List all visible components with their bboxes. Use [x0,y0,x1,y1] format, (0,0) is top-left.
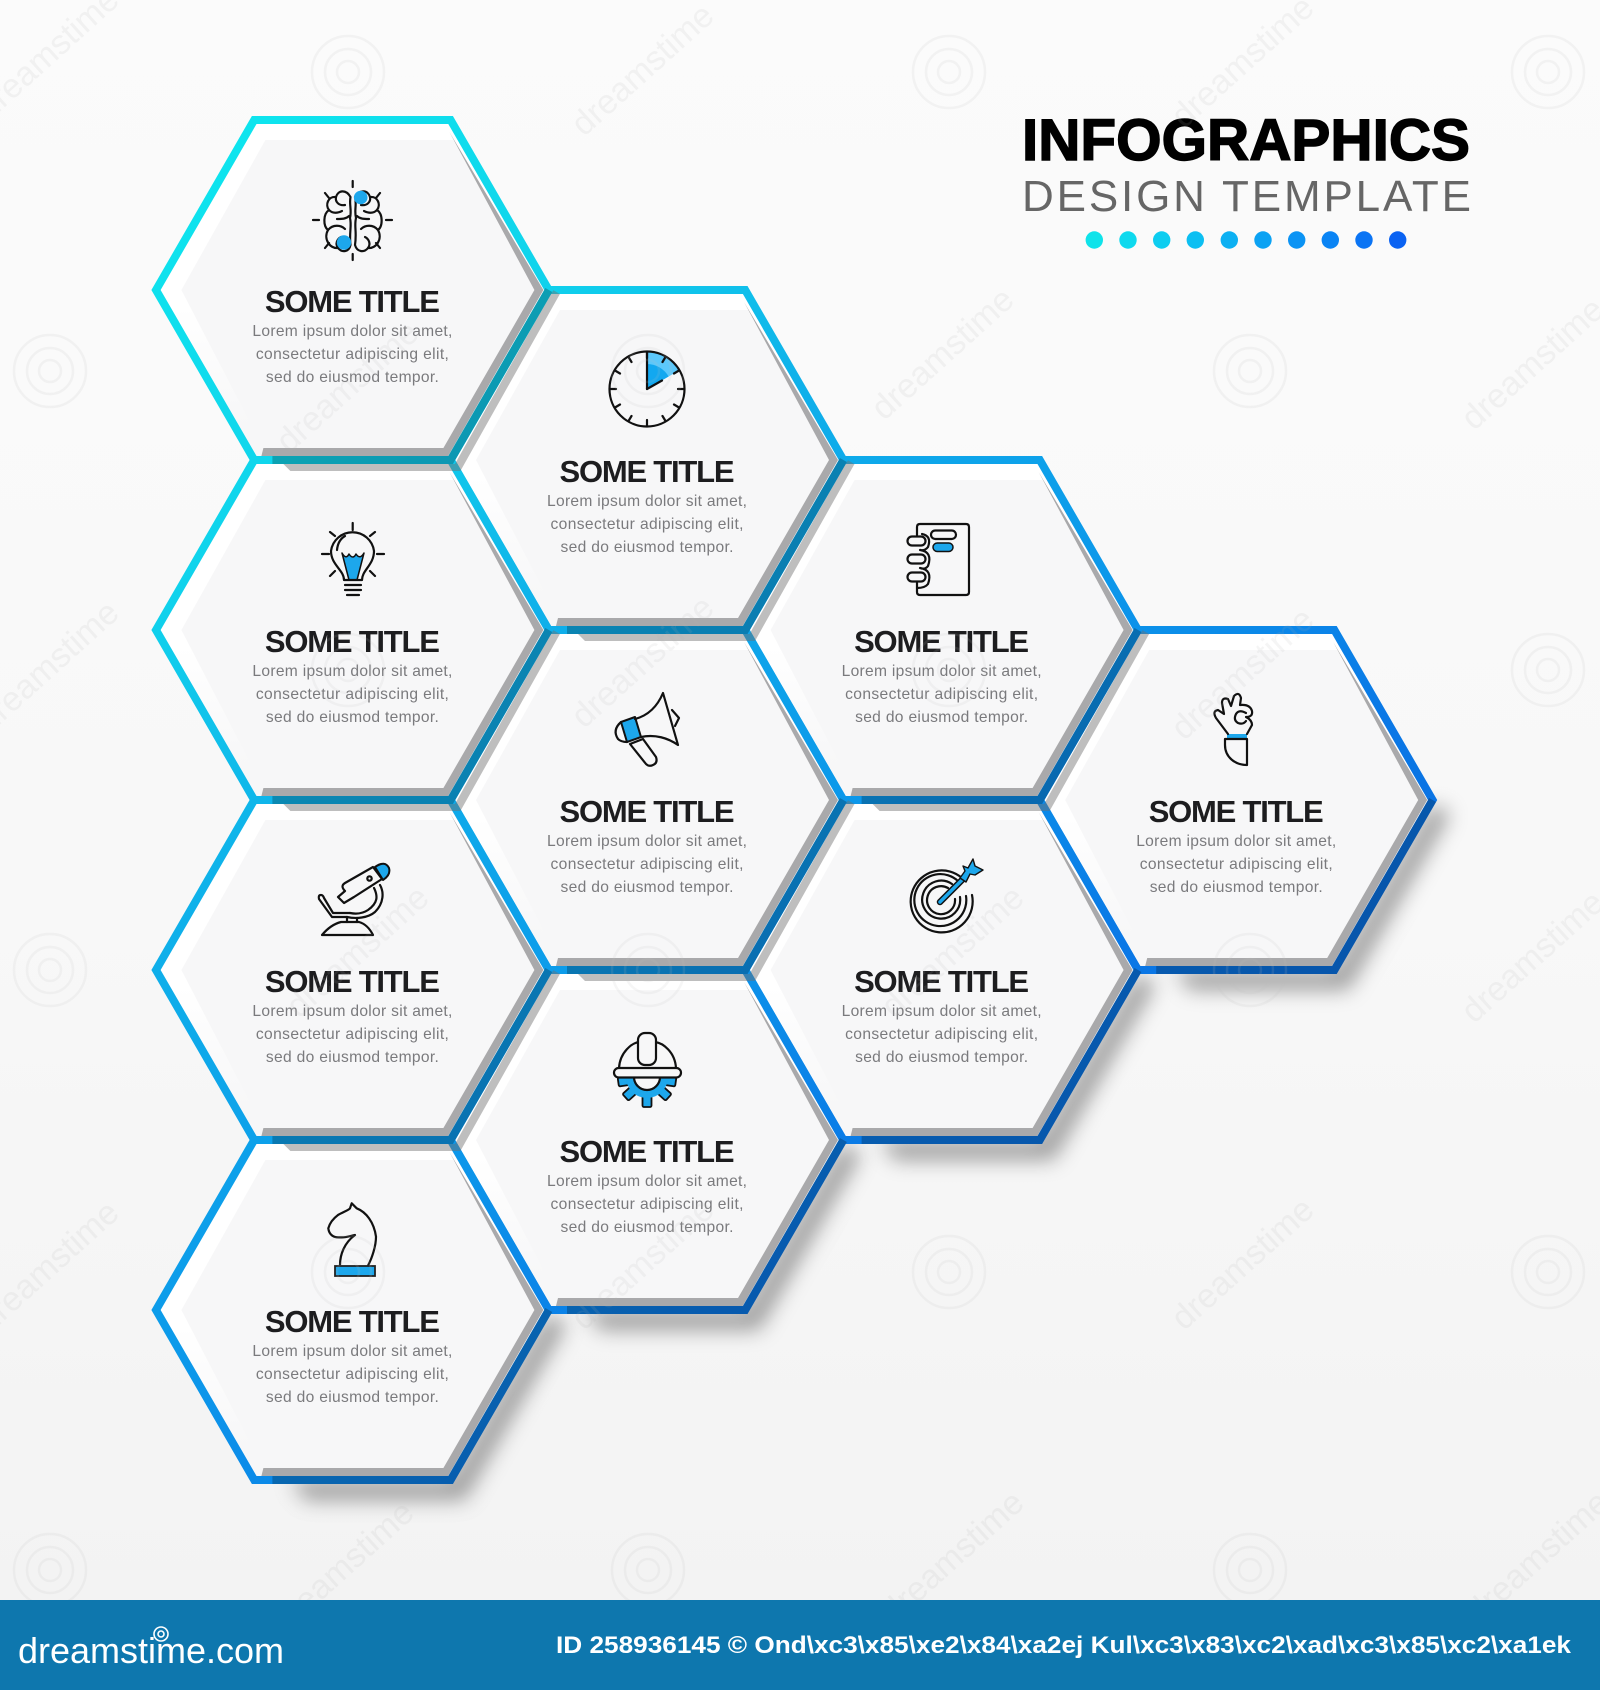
text block: consectetur adipiscing elit, [550,856,744,873]
watermark overlay: dreamstime [564,1190,721,1337]
panel: hexagon column 1, item 1 [156,120,560,471]
text block: consectetur adipiscing elit, [550,1196,744,1213]
watermark overlay: dreamstime [874,1483,1031,1630]
text block: Lorem ipsum dolor sit amet, [252,1343,452,1360]
title: SOME TITLE [265,624,440,659]
icon: brain [313,181,392,260]
footer credit: ID 258936145 © Ond\xc3\x85\xe2\x84\xa2ej Kul\xc3\x83\xc2\xad\xc3\x85\xc2\xa1ek [556,1632,1572,1659]
icon: hard hat with gear [614,1033,681,1107]
watermark overlay: dreamstime [264,1493,421,1640]
text block: sed do eiusmod tempor. [266,1049,439,1066]
panel: hexagon column 3, item 2 [745,800,1138,1140]
footer logo: dreamstime.com [18,1630,284,1671]
text block: sed do eiusmod tempor. [560,1219,734,1236]
title: SOME TITLE [560,794,734,829]
subheading: design template: DESIGN TEMPLATE [1022,172,1471,221]
text block: consectetur adipiscing elit, [550,516,744,533]
soft drop shadow of hexagon cluster [290,804,1450,1500]
text block: sed do eiusmod tempor. [266,369,439,386]
text block [547,833,747,896]
text block [252,323,452,386]
text block: consectetur adipiscing elit, [256,346,449,363]
title: SOME TITLE [854,624,1029,659]
panel: hexagon column 1, item 2 [156,460,560,811]
text block [252,1003,452,1066]
text block: consectetur adipiscing elit, [256,686,449,703]
text block [547,493,747,556]
title: SOME TITLE [560,1134,734,1169]
watermark overlay: dreamstime [874,878,1031,1025]
watermark overlay: dreamstime [279,878,436,1025]
text block: sed do eiusmod tempor. [266,1389,439,1406]
panel: hexagon column 4, item 1 [1040,630,1433,970]
watermark overlay: dreamstime [564,0,721,143]
text block: sed do eiusmod tempor. [560,539,734,556]
text block: Lorem ipsum dolor sit amet, [252,1003,452,1020]
text block: consectetur adipiscing elit, [256,1026,449,1043]
text block: consectetur adipiscing elit, [845,686,1038,703]
text block [842,1003,1042,1066]
text block: Lorem ipsum dolor sit amet, [547,833,747,850]
icon: target with arrow [911,859,983,932]
text block: consectetur adipiscing elit, [1140,856,1333,873]
text block [252,1343,452,1406]
title: SOME TITLE [265,1304,440,1339]
text block [842,663,1042,726]
icon: microscope [319,864,389,935]
icon: OK hand [1214,694,1252,765]
heading: infographics: INFOGRAPHICS [1022,108,1470,173]
text block: sed do eiusmod tempor. [266,709,439,726]
text block: consectetur adipiscing elit, [256,1366,449,1383]
panel: hexagon column 1, item 3 [156,800,560,1151]
text block: Lorem ipsum dolor sit amet, [1136,833,1336,850]
watermark overlay: dreamstime [269,313,426,460]
text block: Lorem ipsum dolor sit amet, [547,1173,747,1190]
title: SOME TITLE [265,964,440,999]
text block: Lorem ipsum dolor sit amet, [252,663,452,680]
text block: sed do eiusmod tempor. [855,709,1028,726]
icon: chess knight [328,1203,376,1276]
panel: hexagon column 2, item 3 [451,970,843,1310]
text block [1136,833,1336,896]
icon: notebook [908,524,969,595]
text block: consectetur adipiscing elit, [845,1026,1038,1043]
text block [252,663,452,726]
text block: sed do eiusmod tempor. [560,879,734,896]
panel: hexagon column 3, item 1 [745,460,1149,811]
footer bar [0,1600,1600,1690]
icon: light bulb [322,523,384,595]
title: SOME TITLE [560,454,734,489]
panel: hexagon column 1, item 4 [156,1140,549,1480]
text block: sed do eiusmod tempor. [1150,879,1323,896]
text block: Lorem ipsum dolor sit amet, [547,493,747,510]
text block: Lorem ipsum dolor sit amet, [842,1003,1042,1020]
title: SOME TITLE [1149,794,1324,829]
watermark overlay: dreamstime [564,588,721,735]
title: SOME TITLE [854,964,1029,999]
watermark overlay: dreamstime [864,280,1021,427]
text block: Lorem ipsum dolor sit amet, [252,323,452,340]
watermark overlay: dreamstime [1164,1190,1321,1337]
text block: sed do eiusmod tempor. [855,1049,1028,1066]
icon: megaphone [616,693,679,766]
panel: hexagon column 2, item 1 [451,290,854,641]
decorative dot row [1086,231,1406,249]
title: SOME TITLE [265,284,440,319]
text block [547,1173,747,1236]
panel: hexagon column 2, item 2 [451,630,854,981]
icon: clock with blue sector [610,352,684,426]
watermark overlay: dreamstime [1164,600,1321,747]
text block: Lorem ipsum dolor sit amet, [842,663,1042,680]
